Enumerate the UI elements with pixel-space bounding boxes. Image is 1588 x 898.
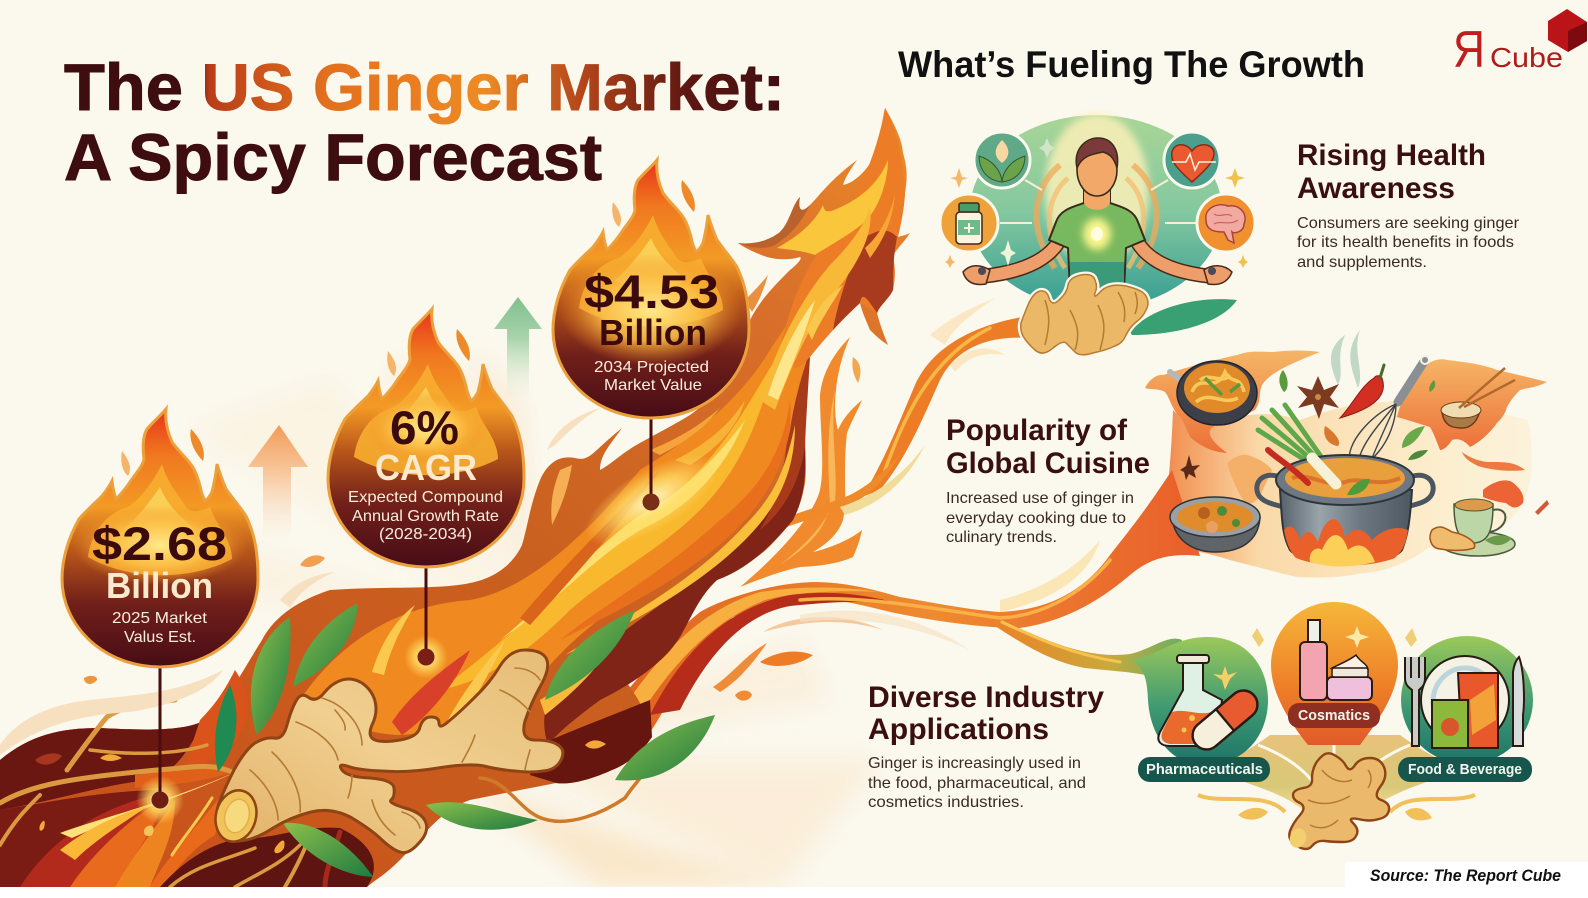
text: global cuisine: culinary trends. bbox=[946, 529, 1057, 546]
logo: RCube: Cube bbox=[1490, 42, 1563, 73]
arrow: green growth bbox=[494, 297, 542, 400]
title bbox=[64, 50, 785, 194]
caption: Market Value bbox=[604, 377, 702, 394]
value: $4.53 bbox=[584, 265, 719, 318]
flecks bbox=[35, 753, 62, 765]
flecks bbox=[760, 651, 813, 666]
unit: CAGR bbox=[375, 447, 477, 488]
branch streams bbox=[600, 298, 1200, 765]
caption: Expected Compound bbox=[348, 489, 503, 506]
glow around middle dot bbox=[571, 437, 731, 563]
cooking pot bbox=[1257, 450, 1433, 566]
text: diverse industry applications bbox=[868, 681, 1104, 811]
heading: what's fueling the growth: What’s Fueling The Growth bbox=[898, 44, 1365, 85]
source credit bbox=[1345, 862, 1588, 898]
flame fronds right of main mass bbox=[600, 337, 925, 701]
icon: plate bbox=[1421, 656, 1509, 744]
root fan connectors bbox=[1210, 735, 1460, 820]
label: pharmaceuticals: Pharmaceuticals bbox=[1146, 762, 1263, 778]
steam bbox=[1331, 330, 1360, 388]
callout: 2025 market value bbox=[62, 409, 258, 824]
icon: supplement bottle bbox=[940, 194, 998, 252]
source credit: Source: The Report Cube bbox=[1370, 866, 1561, 885]
caption bbox=[112, 610, 208, 646]
leaves on ginger bbox=[215, 603, 715, 877]
text: global cuisine: Global Cuisine bbox=[946, 447, 1150, 480]
stream: to industry applications bbox=[995, 618, 1182, 684]
caption bbox=[348, 489, 503, 543]
tea cup and ginger bbox=[1430, 499, 1515, 556]
lower left strands bbox=[60, 773, 233, 838]
section: industry applications illustration bbox=[1130, 602, 1533, 850]
leaf bbox=[545, 610, 635, 700]
label: food and beverage bbox=[1398, 757, 1532, 782]
cut end bbox=[210, 786, 262, 846]
stem bbox=[642, 410, 660, 510]
stream: to global cuisine bbox=[600, 470, 1200, 765]
label: food and beverage: Food & Beverage bbox=[1408, 762, 1522, 778]
chili pepper bbox=[1340, 376, 1383, 418]
text: diverse industry applications: the food, pharmaceutical, and bbox=[868, 775, 1086, 792]
caption: 2025 Market bbox=[112, 610, 208, 627]
text: diverse industry applications: cosmetics industries. bbox=[868, 794, 1024, 811]
text: rising health awareness: for its health benefits in foods bbox=[1297, 234, 1514, 251]
small frond beside bubble bbox=[745, 275, 768, 312]
side bowl with curry bbox=[1170, 497, 1260, 552]
leaf bbox=[251, 617, 291, 735]
unit: Billion bbox=[599, 312, 707, 353]
text: global cuisine: Increased use of ginger in bbox=[946, 490, 1134, 507]
text: rising health awareness bbox=[1297, 139, 1520, 271]
stem bbox=[136, 660, 184, 824]
icon: capsule bbox=[1187, 685, 1263, 755]
caption: 2034 Projected bbox=[594, 359, 709, 376]
logo: RCube: R bbox=[1453, 21, 1485, 79]
icon: flask bbox=[1158, 655, 1222, 746]
red wedge near ginger bbox=[392, 650, 470, 735]
backdrop bbox=[970, 115, 1222, 309]
title: A Spicy Forecast bbox=[64, 120, 602, 194]
icon: spray bottle bbox=[1300, 620, 1327, 700]
whisk bbox=[1349, 356, 1429, 468]
text: global cuisine: everyday cooking due to bbox=[946, 510, 1126, 527]
stream: to health awareness bbox=[862, 316, 1030, 497]
yellow bands bbox=[440, 360, 775, 690]
icon: fork bbox=[1405, 657, 1425, 746]
text: global cuisine bbox=[946, 414, 1150, 546]
text: rising health awareness: and supplements. bbox=[1297, 254, 1427, 271]
background light rays bbox=[120, 350, 880, 887]
leaf bbox=[1130, 299, 1237, 335]
floating leaves bbox=[1279, 370, 1288, 392]
logo: RCube bbox=[1453, 9, 1587, 79]
arrow: orange growth bbox=[248, 425, 308, 540]
bowl with chopsticks bbox=[1441, 368, 1515, 428]
unit: Billion bbox=[106, 565, 213, 606]
text: global cuisine: Popularity of bbox=[946, 414, 1128, 447]
person bbox=[963, 138, 1232, 290]
star anise bbox=[1297, 376, 1339, 419]
icon: brain bbox=[1197, 194, 1255, 252]
caption: Annual Growth Rate bbox=[352, 508, 499, 525]
icon: leaf bbox=[974, 132, 1030, 188]
section: global cuisine illustration bbox=[1170, 330, 1515, 566]
bottom strip bbox=[0, 887, 1588, 898]
callout: CAGR bbox=[328, 309, 524, 679]
green onions bbox=[1258, 405, 1322, 462]
blob: pharmaceuticals bbox=[1130, 637, 1268, 765]
leaf bbox=[615, 715, 715, 781]
title: The US Ginger Market: bbox=[64, 50, 785, 124]
text: diverse industry applications: Ginger is increasingly used in bbox=[868, 755, 1081, 772]
small star anise bbox=[1180, 455, 1200, 480]
sparkles bbox=[945, 138, 1248, 268]
upper flame details bbox=[780, 108, 905, 368]
leaf bbox=[426, 802, 538, 830]
lower left maroon bbox=[0, 720, 205, 810]
text: diverse industry applications: Applications bbox=[868, 713, 1049, 746]
text: rising health awareness: Consumers are seeking ginger bbox=[1297, 215, 1520, 232]
label: pharmaceuticals bbox=[1138, 757, 1270, 782]
maroon band lower right bbox=[544, 440, 805, 745]
caption: Valus Est. bbox=[124, 629, 196, 646]
peach wisps bbox=[0, 408, 600, 755]
strand across flame bbox=[600, 455, 900, 700]
icon: heart bbox=[1164, 132, 1220, 188]
wisps bbox=[930, 298, 995, 345]
text: rising health awareness: Rising Health bbox=[1297, 139, 1486, 172]
blob: cosmetics bbox=[1271, 602, 1398, 745]
label: cosmetics: Cosmatics bbox=[1298, 708, 1370, 724]
caption bbox=[594, 359, 709, 394]
value: 6% bbox=[390, 401, 459, 454]
leaf bbox=[215, 685, 236, 772]
callout: 2034 projected value bbox=[553, 160, 749, 510]
wok with noodles bbox=[1170, 361, 1257, 425]
value: $2.68 bbox=[92, 517, 227, 570]
map background: global cuisine bbox=[1130, 350, 1549, 578]
icon: snack packs bbox=[1432, 673, 1498, 748]
leaf bbox=[283, 823, 373, 877]
continents bbox=[1145, 350, 1320, 453]
ginger bbox=[1289, 753, 1389, 849]
icon: cream jar bbox=[1327, 655, 1372, 700]
ginger bbox=[1021, 275, 1148, 355]
main flame mass bbox=[0, 108, 910, 887]
blob: food and beverage bbox=[1401, 636, 1533, 764]
sparkle bbox=[1213, 666, 1237, 690]
label: cosmetics bbox=[1288, 703, 1380, 728]
section: rising health awareness illustration bbox=[940, 114, 1255, 355]
text: rising health awareness: Awareness bbox=[1297, 172, 1455, 205]
icon: knife bbox=[1513, 657, 1524, 746]
orange band bbox=[300, 250, 840, 735]
caption: (2028-2034) bbox=[379, 526, 472, 543]
ginger root: main bbox=[210, 650, 563, 853]
text: diverse industry applications: Diverse Industry bbox=[868, 681, 1104, 714]
stem bbox=[404, 560, 448, 679]
sparkles bbox=[1345, 626, 1369, 648]
leaf bbox=[293, 603, 358, 687]
